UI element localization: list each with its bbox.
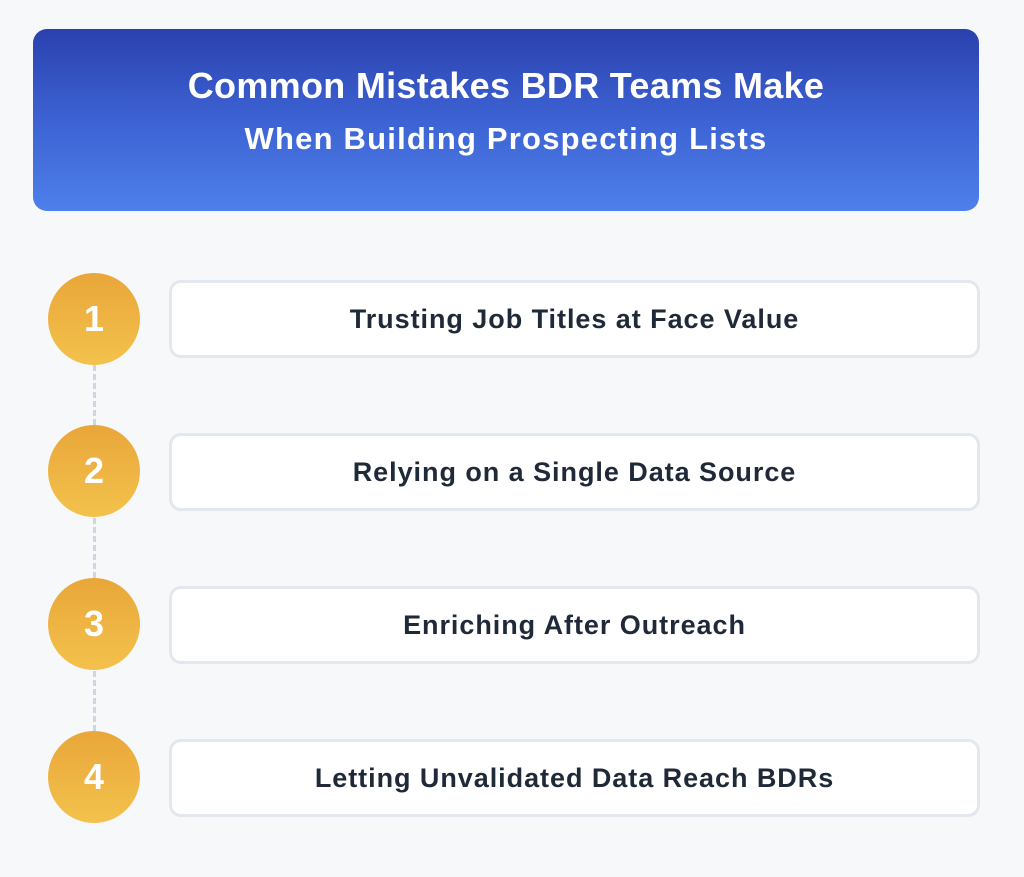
step 2 card <box>169 433 980 511</box>
connector 1-2 <box>93 365 96 425</box>
step 2 card: Relying on a Single Data Source <box>353 457 796 487</box>
step 4 number <box>48 731 140 823</box>
step 3 number: 3 <box>84 603 104 644</box>
step 1 number <box>48 273 140 365</box>
step 4 card <box>169 739 980 817</box>
title line 2: When Building Prospecting Lists <box>245 121 767 156</box>
step 3 card <box>169 586 980 664</box>
step 1 number: 1 <box>84 298 104 339</box>
step 2 number <box>48 425 140 517</box>
step 4 number: 4 <box>84 756 104 797</box>
title line 1: Common Mistakes BDR Teams Make <box>188 65 824 106</box>
connector 2-3 <box>93 518 96 578</box>
step 4 card: Letting Unvalidated Data Reach BDRs <box>315 763 834 793</box>
step 1 card <box>169 280 980 358</box>
step 2 number: 2 <box>84 450 104 491</box>
step 3 card: Enriching After Outreach <box>403 610 746 640</box>
step 1 card: Trusting Job Titles at Face Value <box>350 304 799 334</box>
connector 3-4 <box>93 671 96 731</box>
step 3 number <box>48 578 140 670</box>
header banner <box>33 29 979 211</box>
